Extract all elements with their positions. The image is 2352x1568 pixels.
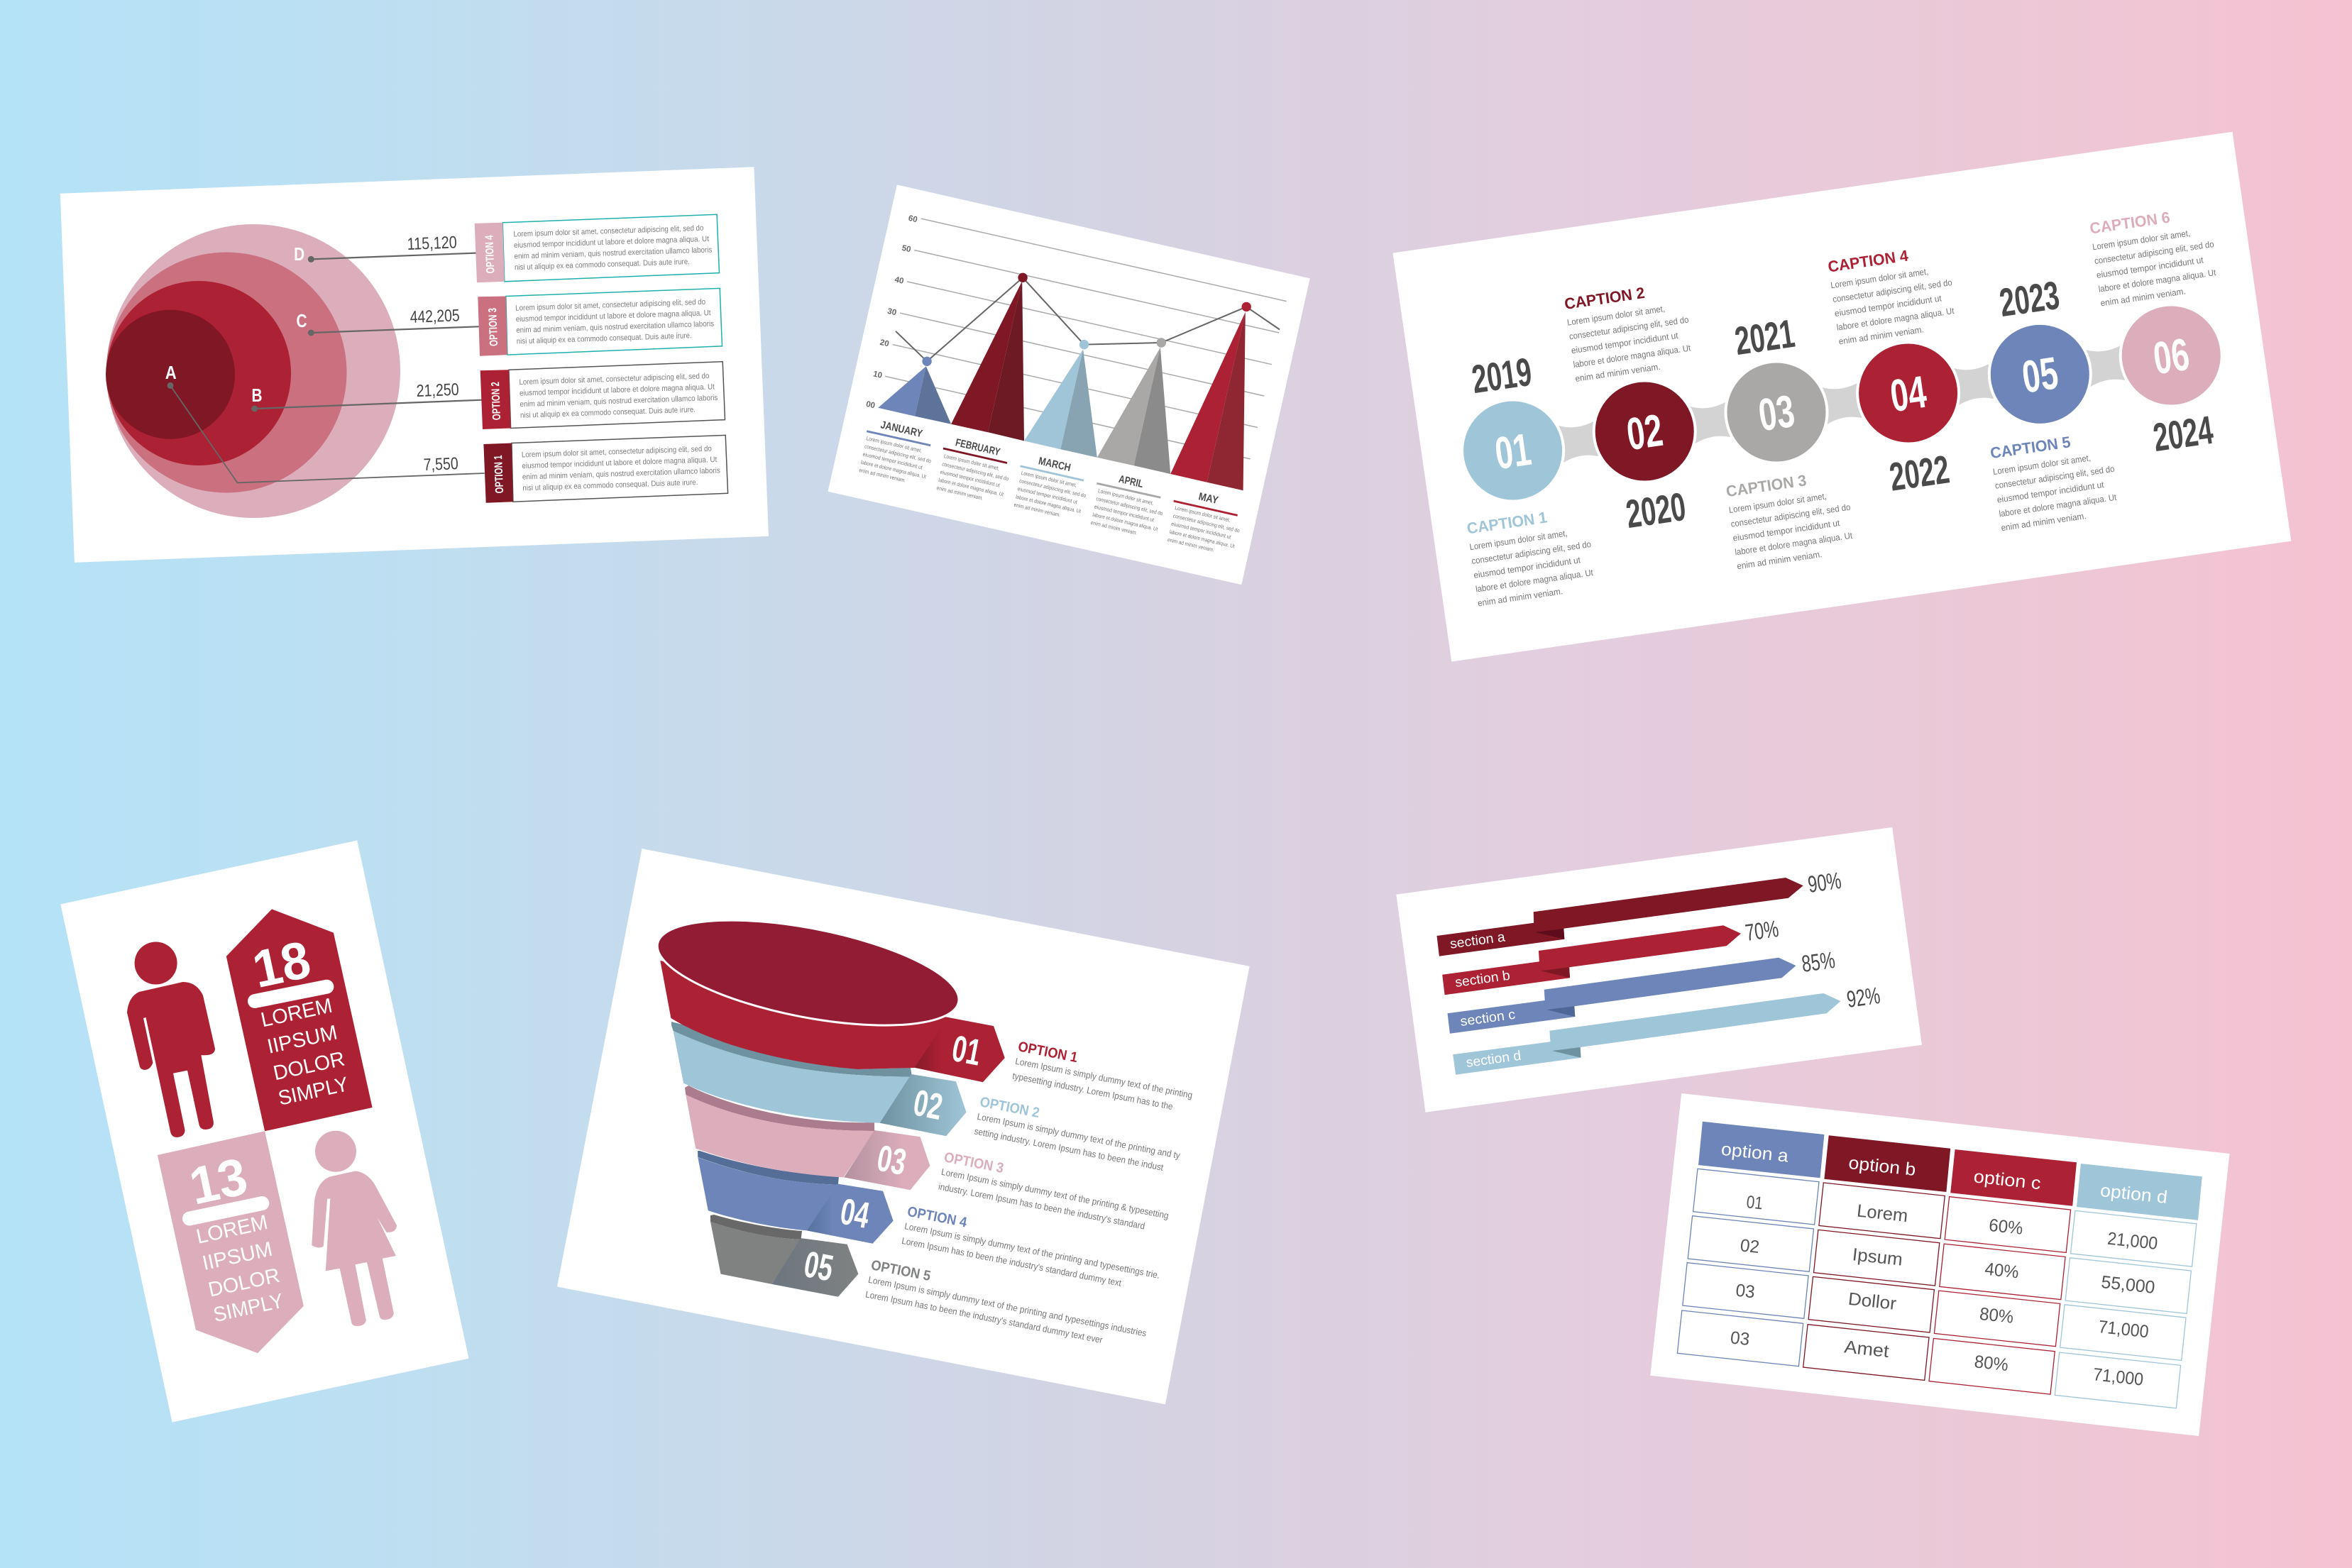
- icon: woman: [312, 1131, 397, 1326]
- header cells: [1698, 1122, 2202, 1220]
- option 2 text: setting industry. Lorem Ipsum has to been the indust: [974, 1125, 1165, 1173]
- tag: 13: IIPSUM: [200, 1238, 275, 1275]
- tag: 13: 13: [185, 1147, 252, 1216]
- option 2 text: OPTION 2: [979, 1094, 1040, 1121]
- caption 3: CAPTION 3: [1725, 471, 1808, 500]
- caption 5: labore et dolore magna aliqua. Ut: [1999, 492, 2118, 519]
- caption 4: eiusmod tempor incididunt ut: [1834, 293, 1942, 319]
- column: February: eiusmod tempor incididunt ut: [940, 469, 1001, 489]
- column: March: consectetur adipiscing elit, sed do: [1018, 477, 1087, 499]
- option 3 box: [478, 288, 722, 356]
- step 04: 04: [1887, 366, 1930, 421]
- column: April: consectetur adipiscing elit, sed do: [1096, 495, 1163, 517]
- option 1 text: typesetting industry. Lorem Ipsum has to the: [1011, 1070, 1174, 1112]
- bar: section c: section c: [1459, 1007, 1516, 1029]
- caption 2: enim ad minim veniam.: [1575, 362, 1661, 384]
- column: January: eiusmod tempor incididunt ut: [862, 451, 923, 471]
- table values: 55,000: [2100, 1272, 2156, 1298]
- column c cells: [1929, 1197, 2071, 1394]
- years: 2023: [1996, 272, 2062, 325]
- option 2 box: Lorem ipsum dolor sit amet, consectetur adipiscing elit, sed do: [519, 372, 710, 387]
- option 4 box: OPTION 4: [483, 235, 497, 274]
- panel: table: [1650, 1093, 2230, 1436]
- caption 1: enim ad minim veniam.: [1477, 586, 1564, 608]
- years: 2019: [1469, 349, 1534, 402]
- caption 4: [1827, 241, 1959, 347]
- option 4 text: Lorem Ipsum is simply dummy text of the printing and typesettings trie.: [903, 1220, 1160, 1281]
- table values: Amet: [1843, 1337, 1890, 1362]
- column: April: enim ad minim veniam.: [1090, 519, 1138, 536]
- column: February: enim ad minim veniam.: [936, 485, 984, 502]
- caption 3: labore et dolore magna aliqua. Ut: [1735, 531, 1853, 557]
- column: January: labore et dolore magna aliqua. Ut: [860, 459, 928, 480]
- column: February: [936, 436, 1011, 506]
- option 3 text: [938, 1149, 1173, 1235]
- option 4 text: Lorem Ipsum has to been the industry's standard dummy text: [901, 1235, 1123, 1288]
- values: 21,250: [416, 380, 459, 401]
- bar: section d: 92%: [1845, 982, 1881, 1012]
- step 06: [2121, 305, 2222, 406]
- option 1 box: [483, 435, 728, 503]
- caption 5: CAPTION 5: [1989, 433, 2072, 462]
- caption 6: enim ad minim veniam.: [2100, 286, 2186, 309]
- tag: 13: SIMPLY: [211, 1290, 285, 1327]
- option 5 text: Lorem Ipsum is simply dummy text of the printing and typesettings industries: [867, 1274, 1148, 1339]
- panel: funnel: [557, 849, 1250, 1404]
- tag: 13: LOREM: [194, 1211, 270, 1249]
- table values: 60%: [1988, 1215, 2024, 1239]
- column: March: MARCH: [1038, 455, 1072, 474]
- step 06: 06: [2150, 328, 2192, 384]
- panel: concentric circles: [60, 167, 769, 563]
- table values: [1730, 1192, 2159, 1390]
- option 3 text: OPTION 3: [943, 1149, 1005, 1176]
- step 01: [1462, 400, 1564, 501]
- circle letters: A: [165, 362, 177, 383]
- caption 1: eiusmod tempor incididunt ut: [1473, 555, 1581, 580]
- caption 3: enim ad minim veniam.: [1736, 549, 1823, 571]
- table values: 02: [1740, 1235, 1760, 1257]
- column: March: Lorem ipsum dolor sit amet,: [1021, 470, 1077, 488]
- bar: section b: [1442, 915, 1780, 995]
- option 3 box: eiusmod tempor incididunt ut labore et dolore magna aliqua. Ut: [516, 309, 711, 324]
- step 02: 02: [1623, 404, 1666, 460]
- table values: 80%: [1973, 1352, 2009, 1375]
- bar: section c: 85%: [1800, 946, 1837, 977]
- table values: 03: [1730, 1327, 1751, 1349]
- caption 1: Lorem ipsum dolor sit amet,: [1469, 529, 1568, 552]
- column: March: eiusmod tempor incididunt ut: [1017, 485, 1078, 505]
- years: 2024: [2150, 407, 2216, 460]
- caption 1: consectetur adipiscing elit, sed do: [1471, 539, 1592, 566]
- column: May: [1167, 490, 1242, 558]
- funnel level 05: [710, 1215, 858, 1297]
- step 04: [1857, 342, 1959, 444]
- header cells: option b: [1847, 1153, 1917, 1180]
- option 3 text: Lorem Ipsum is simply dummy text of the printing & typesetting: [940, 1166, 1170, 1221]
- option 1 text: Lorem Ipsum is simply dummy text of the printing: [1014, 1056, 1193, 1100]
- column: May: Lorem ipsum dolor sit amet,: [1175, 504, 1231, 524]
- option 2 box: [480, 362, 725, 429]
- triangle: April: [1097, 348, 1170, 474]
- option 4 text: [901, 1204, 1164, 1296]
- table values: Lorem: [1856, 1201, 1909, 1226]
- circle letters: [165, 243, 307, 406]
- funnel level 04: 04: [837, 1191, 873, 1237]
- column: March: [1013, 455, 1089, 523]
- tag: 18: 18: [248, 929, 315, 999]
- funnel level 04: [698, 1151, 894, 1244]
- column: January: enim ad minim veniam.: [859, 467, 906, 484]
- header cells: option c: [1972, 1166, 2042, 1193]
- caption 1: labore et dolore magna aliqua. Ut: [1475, 568, 1594, 595]
- caption 2: consectetur adipiscing elit, sed do: [1568, 314, 1689, 342]
- option 4 box: enim ad minim veniam, quis nostrud exercitation ullamco laboris: [514, 245, 713, 261]
- tag: 18: SIMPLY: [276, 1073, 351, 1110]
- caption 6: Lorem ipsum dolor sit amet,: [2092, 228, 2191, 252]
- years: 2021: [1732, 311, 1798, 363]
- panel: ribbon bars: [1396, 827, 1922, 1112]
- caption 6: [2089, 203, 2221, 309]
- leader dots: [167, 256, 314, 412]
- caption 5: eiusmod tempor incididunt ut: [1996, 480, 2105, 505]
- column: February: labore et dolore magna aliqua. Ut: [938, 477, 1005, 498]
- column d cells: [2055, 1210, 2197, 1408]
- option 2 text: [974, 1094, 1185, 1176]
- values: 7,550: [423, 454, 458, 475]
- bar: section d: section d: [1465, 1049, 1522, 1071]
- values: [407, 233, 460, 475]
- column: April: [1090, 473, 1165, 541]
- column: February: Lorem ipsum dolor sit amet,: [943, 453, 1000, 472]
- bar: section c: [1448, 946, 1837, 1034]
- caption 2: Lorem ipsum dolor sit amet,: [1566, 304, 1666, 328]
- panel: gender statistics: [60, 840, 469, 1423]
- funnel level 03: 03: [874, 1138, 909, 1183]
- caption 2: labore et dolore magna aliqua. Ut: [1573, 343, 1692, 370]
- caption 4: Lorem ipsum dolor sit amet,: [1830, 267, 1929, 290]
- caption 4: labore et dolore magna aliqua. Ut: [1836, 306, 1955, 333]
- triangle: March: [1024, 349, 1097, 458]
- step 03: 03: [1755, 385, 1798, 441]
- caption 4: enim ad minim veniam.: [1838, 324, 1925, 347]
- bar: section b: 70%: [1744, 915, 1780, 946]
- tag: 18: LOREM: [259, 995, 334, 1032]
- option 1 text: OPTION 1: [1017, 1039, 1079, 1066]
- table values: 71,000: [2092, 1364, 2144, 1390]
- funnel level 01: 01: [949, 1028, 984, 1074]
- column: January: Lorem ipsum dolor sit amet,: [866, 435, 923, 454]
- axis labels: 10: [872, 370, 883, 380]
- option 1 box: OPTION 1: [493, 455, 506, 494]
- tag: 13: [158, 1131, 304, 1353]
- option 3 box: Lorem ipsum dolor sit amet, consectetur adipiscing elit, sed do: [515, 298, 705, 313]
- option 3 text: industry. Lorem Ipsum has to been the industry's standard: [938, 1181, 1146, 1232]
- circle letters: C: [297, 310, 307, 331]
- column: February: consectetur adipiscing elit, sed do: [942, 460, 1009, 482]
- option 1 box: enim ad minim veniam, quis nostrud exercitation ullamco laboris: [522, 466, 720, 482]
- bar: section d: [1453, 982, 1881, 1075]
- trend line: [896, 277, 1280, 361]
- column: May: enim ad minim veniam.: [1167, 536, 1215, 553]
- funnel level 03: [685, 1086, 930, 1190]
- step 02: [1594, 380, 1696, 482]
- column: March: enim ad minim veniam.: [1013, 502, 1061, 518]
- icon: man: [127, 942, 215, 1137]
- caption 4: CAPTION 4: [1827, 246, 1910, 276]
- caption 2: [1564, 278, 1696, 384]
- table values: Dollor: [1847, 1289, 1897, 1314]
- axis labels: 40: [894, 275, 904, 286]
- trend dots: [922, 273, 1251, 366]
- option 1 text: [1011, 1039, 1197, 1115]
- caption 1: [1466, 502, 1598, 608]
- option 5 text: OPTION 5: [869, 1257, 932, 1284]
- axis labels: 00: [865, 400, 876, 410]
- caption 3: [1725, 465, 1857, 571]
- triangle: May: [1170, 312, 1246, 490]
- caption 2: CAPTION 2: [1564, 284, 1646, 313]
- option 4 box: eiusmod tempor incididunt ut labore et dolore magna aliqua. Ut: [514, 235, 709, 250]
- column: May: labore et dolore magna aliqua. Ut: [1169, 529, 1236, 550]
- caption 6: CAPTION 6: [2089, 209, 2171, 238]
- circle letters: D: [294, 243, 304, 265]
- option 1 box: Lorem ipsum dolor sit amet, consectetur adipiscing elit, sed do: [522, 445, 712, 459]
- option 3 box: enim ad minim veniam, quis nostrud exercitation ullamco laboris: [516, 320, 715, 335]
- funnel level 05: 05: [801, 1244, 837, 1290]
- tag: 18: DOLOR: [271, 1048, 347, 1085]
- caption 6: labore et dolore magna aliqua. Ut: [2098, 267, 2217, 294]
- caption 5: enim ad minim veniam.: [2001, 511, 2087, 533]
- tag: 18: IIPSUM: [265, 1021, 339, 1059]
- option 5 text: Lorem Ipsum has to been the industry's standard dummy text ever: [864, 1288, 1104, 1345]
- funnel top ellipse: [649, 900, 967, 1046]
- table values: 40%: [1984, 1259, 2020, 1282]
- option 2 box: eiusmod tempor incididunt ut labore et dolore magna aliqua. Ut: [520, 382, 715, 398]
- axis labels: 60: [908, 214, 918, 224]
- column b cells: [1803, 1183, 1945, 1380]
- circle letters: B: [251, 385, 263, 406]
- axis labels: 20: [879, 338, 890, 348]
- option 2 box: enim ad minim veniam, quis nostrud exercitation ullamco laboris: [520, 394, 718, 409]
- header cells: option d: [2099, 1181, 2168, 1208]
- column: May: eiusmod tempor incididunt ut: [1170, 521, 1232, 541]
- bar: section b: section b: [1454, 968, 1511, 990]
- bar: section a: [1436, 867, 1843, 956]
- table values: 21,000: [2106, 1229, 2159, 1254]
- funnel level 02: 02: [910, 1082, 946, 1128]
- axis labels: [865, 214, 918, 410]
- step 05: 05: [2019, 347, 2061, 403]
- option 5 text: [864, 1257, 1151, 1353]
- bar: section a: section a: [1449, 929, 1506, 952]
- caption 5: consectetur adipiscing elit, sed do: [1994, 464, 2115, 491]
- step 05: [1989, 324, 2091, 425]
- column: April: eiusmod tempor incididunt ut: [1094, 504, 1155, 524]
- funnel level 02: [671, 1022, 967, 1136]
- circle A: [106, 310, 235, 439]
- circle C: [106, 253, 346, 492]
- panel: mountain chart: [828, 184, 1310, 585]
- option 2 box: nisi ut aliquip ex ea commodo consequat. Duis aute irure.: [520, 406, 696, 420]
- column: April: labore et dolore magna aliqua. Ut: [1092, 512, 1159, 532]
- years: [1469, 272, 2216, 536]
- caption 1: CAPTION 1: [1466, 508, 1549, 537]
- column: March: labore et dolore magna aliqua. Ut: [1015, 494, 1082, 514]
- table values: 71,000: [2097, 1317, 2150, 1342]
- triangle: February: [951, 281, 1024, 441]
- connectors: [1559, 345, 2126, 463]
- circle D: [106, 224, 400, 518]
- caption 5: Lorem ipsum dolor sit amet,: [1992, 453, 2092, 477]
- caption 2: eiusmod tempor incididunt ut: [1571, 331, 1679, 355]
- column a cells: [1677, 1169, 1819, 1367]
- column: January: JANUARY: [879, 419, 923, 440]
- years: 2020: [1623, 484, 1688, 536]
- table values: 03: [1735, 1281, 1756, 1302]
- caption 3: consectetur adipiscing elit, sed do: [1730, 502, 1851, 529]
- table values: 01: [1745, 1192, 1764, 1213]
- axis labels: 30: [886, 307, 897, 317]
- option 4 box: Lorem ipsum dolor sit amet, consectetur adipiscing elit, sed do: [513, 224, 704, 238]
- step 01: 01: [1492, 424, 1534, 479]
- option 2 text: Lorem Ipsum is simply dummy text of the printing and ty: [977, 1111, 1182, 1161]
- column: April: APRIL: [1118, 473, 1145, 490]
- option 3 box: OPTION 3: [487, 308, 500, 346]
- bar: section a: 90%: [1806, 867, 1843, 898]
- values: 115,120: [407, 233, 457, 254]
- table values: 80%: [1979, 1304, 2015, 1327]
- axis labels: 50: [901, 244, 912, 254]
- option 1 box: nisi ut aliquip ex ea commodo consequat. Duis aute irure.: [522, 478, 698, 492]
- column: May: MAY: [1197, 490, 1219, 507]
- column: January: consectetur adipiscing elit, sed do: [864, 443, 932, 464]
- funnel level 01: [660, 961, 1005, 1082]
- caption 3: Lorem ipsum dolor sit amet,: [1728, 491, 1828, 515]
- option 4 box: [475, 214, 720, 282]
- leader lines: [170, 253, 485, 482]
- years: 2022: [1886, 446, 1952, 499]
- option 4 box: nisi ut aliquip ex ea commodo consequat. Duis aute irure.: [515, 258, 690, 272]
- caption 5: [1989, 427, 2121, 533]
- step 03: [1726, 362, 1827, 463]
- caption 6: consectetur adipiscing elit, sed do: [2094, 239, 2214, 266]
- caption 3: eiusmod tempor incididunt ut: [1732, 518, 1841, 543]
- column: April: Lorem ipsum dolor sit amet,: [1097, 487, 1154, 507]
- caption 6: eiusmod tempor incididunt ut: [2096, 255, 2204, 280]
- table values: Ipsum: [1852, 1244, 1903, 1270]
- header cells: option a: [1720, 1139, 1789, 1166]
- option 1 box: eiusmod tempor incididunt ut labore et dolore magna aliqua. Ut: [522, 456, 717, 470]
- option 4 text: OPTION 4: [906, 1204, 969, 1231]
- tag: 18: [226, 909, 373, 1131]
- option 3 box: nisi ut aliquip ex ea commodo consequat. Duis aute irure.: [517, 331, 692, 346]
- panel: timeline: [1392, 132, 2291, 661]
- column: February: FEBRUARY: [955, 436, 1001, 458]
- column: May: consectetur adipiscing elit, sed do: [1172, 512, 1241, 534]
- caption 4: consectetur adipiscing elit, sed do: [1832, 277, 1953, 304]
- circle B: [106, 281, 291, 465]
- values: 442,205: [410, 306, 460, 327]
- column: January: [859, 419, 933, 488]
- tag: 13: DOLOR: [207, 1264, 282, 1302]
- option 2 box: OPTION 2: [490, 382, 503, 420]
- triangle: January: [878, 366, 951, 424]
